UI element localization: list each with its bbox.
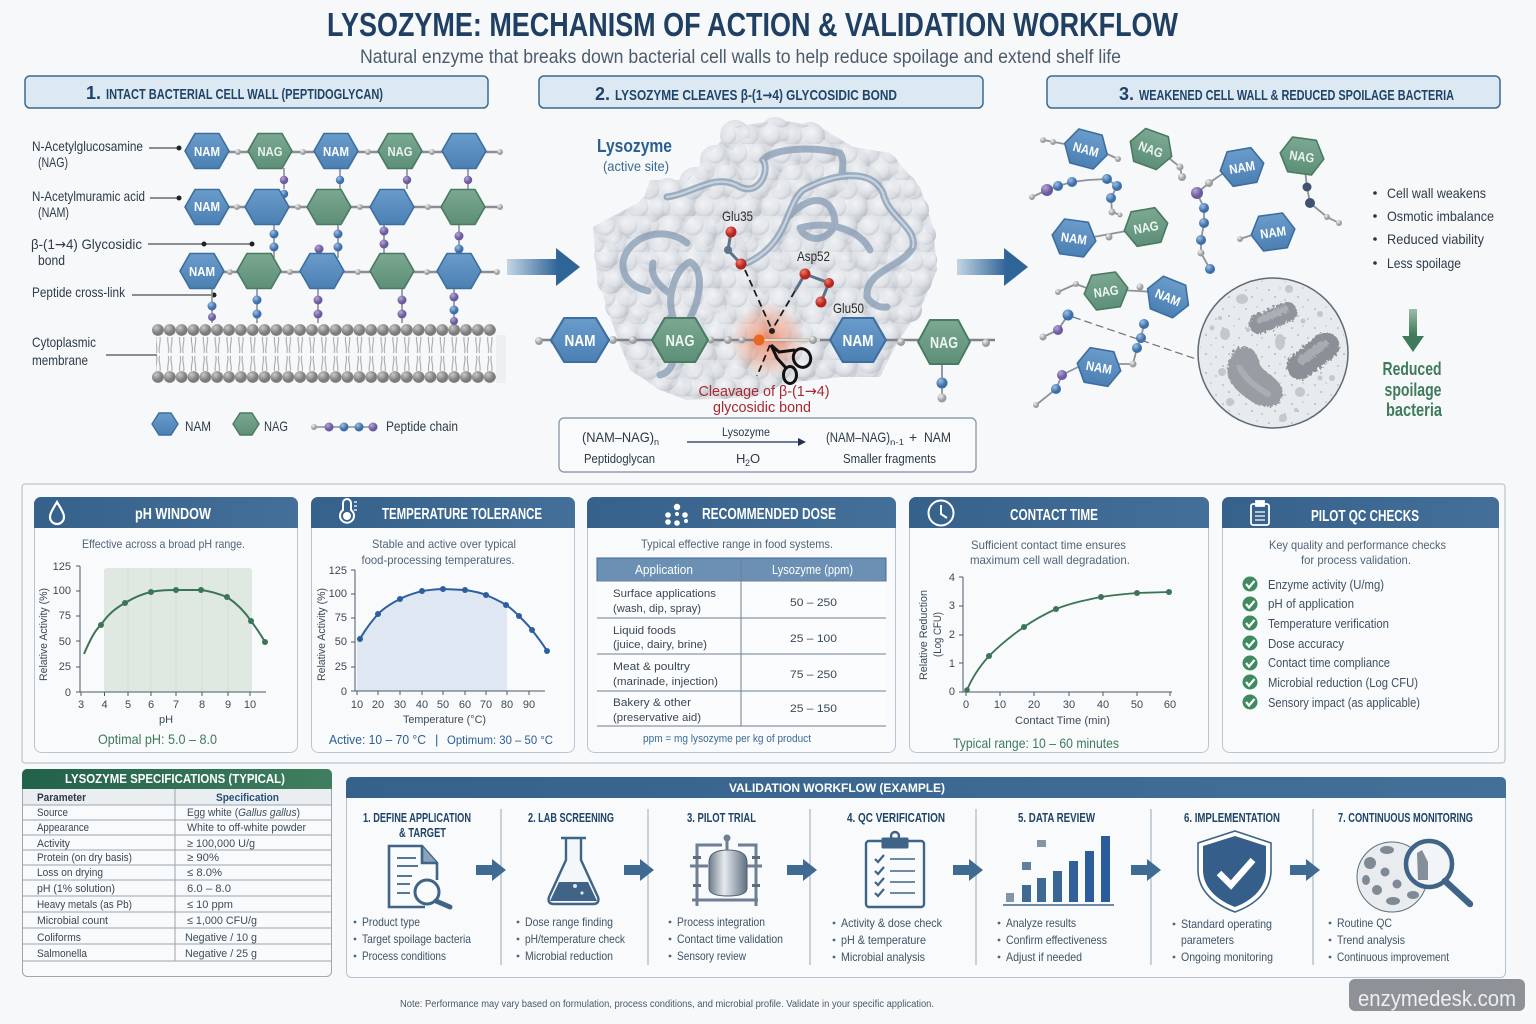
specifications table: Protein (on dry basis) xyxy=(37,852,132,864)
step 2: lab screening: Microbial reduction xyxy=(525,949,613,963)
specifications table: Heavy metals (as Pb) xyxy=(37,899,132,911)
dose table: Surface applications xyxy=(613,588,717,600)
step 7: continuous monitoring: Routine QC xyxy=(1337,916,1392,930)
icon: water drop xyxy=(50,502,64,524)
label: glycosidic bond: β-(1→4) Glycosidic xyxy=(31,236,142,253)
hexagon fragments: NAM xyxy=(1153,286,1183,309)
pilot check list xyxy=(1242,576,1420,710)
dose table: Application xyxy=(635,562,693,577)
temperature activity chart: 75 xyxy=(335,612,347,624)
specifications table: Activity xyxy=(37,838,70,850)
temperature activity chart: 125 xyxy=(329,565,347,577)
hexagon fragments: NAG xyxy=(1093,282,1119,301)
cleavage label: Cleavage of β-(1→4) xyxy=(698,382,830,400)
workflow header: VALIDATION WORKFLOW (EXAMPLE) xyxy=(729,781,945,795)
step 3: pilot trial: Contact time validation xyxy=(677,932,783,946)
step 7: continuous monitoring: Continuous improvement xyxy=(1337,950,1450,964)
contact time chart xyxy=(918,572,1176,727)
temperature activity chart: Temperature (°C) xyxy=(403,714,486,726)
pH activity chart: 5 xyxy=(125,699,131,711)
pilot check list: Dose accuracy xyxy=(1268,637,1345,651)
temperature caption: Active: 10 – 70 °C xyxy=(329,732,426,747)
arrow: reduced spoilage xyxy=(1402,309,1424,352)
step 4: QC verification xyxy=(833,811,945,964)
contact time chart: 0 xyxy=(949,686,955,698)
temperature activity chart: 80 xyxy=(501,699,513,711)
step 1 header xyxy=(25,76,488,108)
label: N-Acetylmuramic acid: N-Acetylmuramic acid xyxy=(32,188,145,204)
pH activity chart: 6 xyxy=(148,699,154,711)
hexagon fragments: NAM xyxy=(1071,139,1100,160)
pilot check list: pH of application xyxy=(1268,597,1354,611)
label: peptide cross-link: Peptide cross-link xyxy=(32,284,126,300)
hexagon sugars: NAM xyxy=(323,144,349,159)
temperature activity chart: 30 xyxy=(394,699,406,711)
specifications table: 6.0 – 8.0 xyxy=(187,883,231,895)
dose subtitle: Typical effective range in food systems. xyxy=(641,537,833,551)
step 7: continuous monitoring xyxy=(1329,811,1473,964)
pH activity chart: Relative Activity (%) xyxy=(38,588,50,681)
panel: temperature tolerance xyxy=(311,497,575,752)
contact time chart: 4 xyxy=(949,572,955,584)
step 7: continuous monitoring: 7. CONTINUOUS MONITORING xyxy=(1338,811,1473,825)
step 5: data review: Confirm effectiveness xyxy=(1006,933,1107,947)
dose table: Meat & poultry xyxy=(613,661,691,673)
peptide fragments xyxy=(1029,137,1342,408)
step 1: define application: & TARGET xyxy=(399,826,446,840)
legend: NAM xyxy=(185,418,211,434)
icon: thermometer xyxy=(340,499,357,523)
specifications table: pH (1% solution) xyxy=(37,883,115,895)
dose table: Lysozyme (ppm) xyxy=(772,562,853,577)
dose table: 75 – 250 xyxy=(790,669,837,681)
specifications table: Salmonella xyxy=(37,948,88,960)
step 6: implementation: Standard operating xyxy=(1181,917,1272,931)
pH activity chart: pH xyxy=(159,714,173,726)
substrate hexagons: NAM xyxy=(842,333,874,350)
pilot check list: Microbial reduction (Log CFU) xyxy=(1268,676,1418,690)
legend: Peptide chain xyxy=(386,418,458,434)
label: cytoplasmic membrane: Cytoplasmic xyxy=(32,334,96,350)
pilot subtitle xyxy=(1269,538,1446,567)
step 5: data review: 5. DATA REVIEW xyxy=(1018,811,1095,825)
workflow arrows xyxy=(476,859,1320,881)
arrow: step 2 to step 3 xyxy=(957,248,1028,286)
heading: lysozyme active site: (active site) xyxy=(603,158,669,174)
specifications table: Appearance xyxy=(37,822,89,834)
step 2: lab screening: 2. LAB SCREENING xyxy=(528,811,614,825)
step 5: data review: Adjust if needed xyxy=(1006,950,1082,964)
reduced spoilage label xyxy=(1382,359,1443,420)
step 2: lab screening xyxy=(517,811,626,963)
temperature activity chart: 25 xyxy=(335,661,347,673)
contact time chart: 10 xyxy=(994,699,1006,711)
step 4: QC verification: pH & temperature xyxy=(841,933,926,947)
label: N-Acetylglucosamine: (NAG) xyxy=(38,154,68,170)
substrate hexagons xyxy=(551,318,970,364)
contact time chart: 60 xyxy=(1164,699,1176,711)
panel: lysozyme enzyme action xyxy=(535,117,995,472)
step 1 header: 1. xyxy=(86,83,101,103)
step 7: continuous monitoring: Trend analysis xyxy=(1337,933,1405,947)
optimal pH caption: Optimal pH: 5.0 – 8.0 xyxy=(98,731,217,747)
temperature caption: | xyxy=(435,732,438,747)
label: glycosidic bond: bond xyxy=(38,252,65,268)
specifications table: White to off-white powder xyxy=(187,822,306,834)
reaction equation box: (NAM–NAG) xyxy=(826,429,890,445)
pilot subtitle: Key quality and performance checks xyxy=(1269,538,1446,552)
step 6: implementation: 6. IMPLEMENTATION xyxy=(1184,811,1280,825)
specifications table: Egg white (Gallus gallus) xyxy=(187,807,300,819)
reaction equation box: n xyxy=(654,437,659,447)
step 1: define application xyxy=(354,811,471,963)
dose footnote: ppm = mg lysozyme per kg of product xyxy=(643,733,811,745)
reaction equation box: O xyxy=(750,451,760,466)
subtitle: Natural enzyme that breaks down bacterial cell walls to help reduce spoilage and extend shelf life xyxy=(360,47,1121,68)
hexagon fragments: NAG xyxy=(1289,147,1315,166)
dose table: Liquid foods xyxy=(613,625,677,637)
panel: validation workflow xyxy=(346,777,1506,978)
step 4: QC verification: Activity & dose check xyxy=(841,916,943,930)
contact time chart: 0 xyxy=(963,699,969,711)
contact time chart: 40 xyxy=(1097,699,1109,711)
reaction equation box: n-1 xyxy=(890,438,905,447)
reaction equation box: Lysozyme xyxy=(722,425,770,439)
title: LYSOZYME: MECHANISM OF ACTION & VALIDATION WORKFLOW xyxy=(327,6,1179,43)
contact header: CONTACT TIME xyxy=(1010,507,1098,524)
dashed zoom line xyxy=(1073,317,1196,359)
effect bullet list: Less spoilage xyxy=(1387,255,1461,271)
temperature header xyxy=(311,497,575,528)
pH activity chart: 25 xyxy=(59,661,71,673)
step 3 header: 3. xyxy=(1119,84,1134,104)
temperature activity chart: 100 xyxy=(329,588,347,600)
step 2 header xyxy=(539,76,983,108)
step 2 header: LYSOZYME CLEAVES β-(1→4) GLYCOSIDIC BOND xyxy=(615,86,897,104)
glycan strands xyxy=(202,149,503,275)
step 6: implementation xyxy=(1173,811,1280,964)
temperature activity chart: 40 xyxy=(416,699,428,711)
step 6: implementation: Ongoing monitoring xyxy=(1181,950,1273,964)
dose table: Bakery & other xyxy=(613,697,691,709)
hexagon sugars: NAG xyxy=(388,144,412,159)
watermark: enzymedesk.com xyxy=(1358,986,1516,1011)
temperature subtitle xyxy=(362,537,516,567)
active site residues: Glu50 xyxy=(833,300,864,316)
specifications table: ≥ 90% xyxy=(187,852,219,864)
pH activity chart: 9 xyxy=(225,699,231,711)
hexagon sugars: NAM xyxy=(189,264,215,279)
step 1: define application: 1. DEFINE APPLICATION xyxy=(363,811,471,825)
pilot header xyxy=(1222,497,1499,528)
reaction equation box: NAM xyxy=(924,429,951,445)
dose table: (preservative aid) xyxy=(613,712,701,724)
step 2 header: 2. xyxy=(595,84,610,104)
specifications table: ≤ 10 ppm xyxy=(187,899,233,911)
heading: lysozyme active site xyxy=(597,136,672,174)
protein ribbon xyxy=(623,149,913,375)
pH activity chart: 7 xyxy=(173,699,179,711)
temperature caption xyxy=(329,732,553,747)
dose table: (wash, dip, spray) xyxy=(613,603,701,615)
step 3: pilot trial: 3. PILOT TRIAL xyxy=(687,811,756,825)
panel: pilot QC checks xyxy=(1222,497,1499,752)
heading: lysozyme active site: Lysozyme xyxy=(597,136,672,156)
reduced spoilage label: bacteria xyxy=(1386,400,1443,420)
substrate hexagons: NAM xyxy=(564,333,596,350)
dose table: (marinade, injection) xyxy=(613,676,718,688)
icon: document magnifier xyxy=(389,846,450,907)
specifications table: Microbial count xyxy=(37,915,108,927)
temperature activity chart: 50 xyxy=(437,699,449,711)
reaction equation box: Smaller fragments xyxy=(843,451,936,466)
hexagon fragments: NAG xyxy=(1137,138,1165,161)
icon: scissors xyxy=(771,345,814,384)
panel: intact cell wall diagram xyxy=(31,134,506,435)
specifications table: Specification xyxy=(216,792,279,804)
temperature activity chart: 10 xyxy=(351,699,363,711)
temperature caption: Optimum: 30 – 50 °C xyxy=(447,733,553,747)
panel: lysozyme specifications xyxy=(22,769,332,976)
hexagon sugars: NAG xyxy=(258,144,282,159)
hexagon sugars: NAM xyxy=(194,199,220,214)
reaction equation box: 2 xyxy=(745,458,750,468)
active site residues xyxy=(722,208,864,376)
step 5: data review xyxy=(998,811,1114,964)
reaction equation box: + xyxy=(909,429,917,445)
contact time chart: 30 xyxy=(1063,699,1075,711)
hexagon sugars xyxy=(180,134,486,288)
reduced spoilage label: spoilage xyxy=(1384,380,1442,400)
dose header xyxy=(587,497,896,528)
pilot subtitle: for process validation. xyxy=(1301,553,1411,567)
label: cytoplasmic membrane: membrane xyxy=(32,352,88,368)
reaction equation box: (NAM–NAG) xyxy=(582,429,654,445)
label: N-Acetylmuramic acid: (NAM) xyxy=(38,204,69,220)
substrate hexagons: NAG xyxy=(666,333,694,350)
specifications table: Coliforms xyxy=(37,932,81,944)
contact time chart: 3 xyxy=(949,600,955,612)
specifications table: Negative / 25 g xyxy=(185,948,257,960)
label: peptide cross-link xyxy=(32,284,216,300)
label: cytoplasmic membrane xyxy=(32,334,157,368)
effect bullet list: Reduced viability xyxy=(1387,231,1484,247)
contact time chart: 50 xyxy=(1131,699,1143,711)
label: glycosidic bond xyxy=(31,236,254,268)
panel: recommended dose xyxy=(587,497,896,752)
step 1 header: INTACT BACTERIAL CELL WALL (PEPTIDOGLYCAN) xyxy=(106,86,383,103)
pH activity chart: 100 xyxy=(53,585,71,597)
pilot header: PILOT QC CHECKS xyxy=(1311,508,1419,525)
arrow: step 1 to step 2 xyxy=(507,248,580,286)
cleavage glow xyxy=(730,302,806,378)
substrate hexagons: NAG xyxy=(930,335,958,352)
contact time chart: 2 xyxy=(949,629,955,641)
step 2: lab screening: Dose range finding xyxy=(525,915,613,929)
step 1: define application: Process conditions xyxy=(362,949,446,963)
step 3 header xyxy=(1047,76,1500,108)
dose table: 50 – 250 xyxy=(790,597,837,609)
icon: pilot tank xyxy=(690,834,762,906)
pH activity chart xyxy=(38,561,268,726)
hexagon fragments: NAM xyxy=(1259,223,1287,242)
panel: weakened cell wall fragments xyxy=(1029,125,1494,428)
pH activity chart: 3 xyxy=(78,699,84,711)
reduced spoilage label: Reduced xyxy=(1382,359,1442,379)
cleavage label: glycosidic bond xyxy=(713,399,811,416)
contact time chart: 20 xyxy=(1028,699,1040,711)
contact subtitle xyxy=(970,538,1130,567)
step 3: pilot trial xyxy=(669,811,783,963)
effect bullet list: Cell wall weakens xyxy=(1387,185,1486,201)
cleavage label xyxy=(698,382,830,416)
step 3: pilot trial: Process integration xyxy=(677,915,765,929)
pH activity chart: 8 xyxy=(199,699,205,711)
performance section frame xyxy=(22,484,1505,763)
hexagon sugars: NAM xyxy=(194,144,220,159)
step 4: QC verification: Microbial analysis xyxy=(841,950,925,964)
effect bullet list xyxy=(1373,185,1494,271)
temperature activity chart: 70 xyxy=(480,699,492,711)
icon: shield check xyxy=(1198,831,1271,912)
label: N-Acetylmuramic acid xyxy=(32,188,182,220)
reaction equation box: H xyxy=(736,451,745,466)
temperature activity chart: 60 xyxy=(459,699,471,711)
specifications table: Negative / 10 g xyxy=(185,932,257,944)
temperature subtitle: Stable and active over typical xyxy=(372,537,516,551)
specifications table: ≤ 8.0% xyxy=(187,867,222,879)
pilot check list: Sensory impact (as applicable) xyxy=(1268,696,1420,710)
temperature header: TEMPERATURE TOLERANCE xyxy=(382,506,542,523)
icon: clipboard xyxy=(1251,501,1269,525)
label: N-Acetylglucosamine: N-Acetylglucosamine xyxy=(32,138,143,154)
contact caption: Typical range: 10 – 60 minutes xyxy=(953,735,1119,751)
contact header xyxy=(909,497,1209,528)
pilot check list: Contact time compliance xyxy=(1268,656,1390,670)
step 1: define application: Target spoilage bacteria xyxy=(362,932,471,946)
specifications header xyxy=(22,769,332,789)
specifications table: Parameter xyxy=(37,792,87,804)
temperature activity chart: 90 xyxy=(523,699,535,711)
panel: pH window xyxy=(34,497,298,752)
pH activity chart: 50 xyxy=(59,636,71,648)
temperature activity chart: Relative Activity (%) xyxy=(316,588,328,681)
icon: clipboard checklist xyxy=(866,832,924,907)
temperature activity chart: 0 xyxy=(341,686,347,698)
reaction equation box: Peptidoglycan xyxy=(584,451,655,466)
pH activity chart: 4 xyxy=(101,699,108,711)
temperature subtitle: food-processing temperatures. xyxy=(362,553,514,567)
lysozyme protein surface xyxy=(593,117,937,400)
micrograph of bacteria xyxy=(1198,278,1348,428)
temperature activity chart: 50 xyxy=(335,636,347,648)
legend xyxy=(152,413,458,435)
step 1: define application: Product type xyxy=(362,915,420,929)
label: N-Acetylglucosamine xyxy=(32,138,182,170)
contact time chart: (Log CFU) xyxy=(932,612,944,657)
icon: bar chart xyxy=(1003,836,1114,905)
temperature activity chart xyxy=(316,565,550,726)
substrate chain xyxy=(535,334,995,402)
pH header: pH WINDOW xyxy=(135,506,212,523)
step 5: data review: Analyze results xyxy=(1006,916,1076,930)
hexagon fragments: NAG xyxy=(1132,218,1160,237)
active site residues: Glu35 xyxy=(722,208,753,224)
step 6: implementation: parameters xyxy=(1181,933,1234,947)
workflow header xyxy=(346,777,1506,798)
pH activity chart: 0 xyxy=(65,687,71,699)
icon: petri dish magnifier xyxy=(1357,841,1470,912)
contact time chart: 1 xyxy=(949,658,955,670)
dose header: RECOMMENDED DOSE xyxy=(702,506,836,523)
temperature activity chart: 20 xyxy=(372,699,384,711)
dose table: (juice, dairy, brine) xyxy=(613,639,707,651)
contact subtitle: Sufficient contact time ensures xyxy=(971,538,1126,552)
pH subtitle: Effective across a broad pH range. xyxy=(82,537,245,551)
pH activity chart: 75 xyxy=(59,610,71,622)
icon: flask xyxy=(549,838,598,904)
specifications table: Loss on drying xyxy=(37,867,103,879)
specifications table: ≥ 100,000 U/g xyxy=(187,838,255,850)
pH header xyxy=(34,497,298,528)
step 3: pilot trial: Sensory review xyxy=(677,949,746,963)
contact time chart: Contact Time (min) xyxy=(1015,715,1110,727)
pilot check list: Temperature verification xyxy=(1268,617,1389,631)
contact time chart: Relative Reduction xyxy=(918,590,930,680)
cytoplasmic membrane xyxy=(152,323,506,384)
specifications table: ≤ 1,000 CFU/g xyxy=(187,915,257,927)
specifications header: LYSOZYME SPECIFICATIONS (TYPICAL) xyxy=(65,771,285,786)
icon: dose dots xyxy=(665,504,688,526)
peptide cross-links xyxy=(208,168,472,325)
icon: clock xyxy=(928,500,954,526)
hexagon fragments xyxy=(1050,125,1326,388)
panel: contact time xyxy=(909,497,1209,752)
hexagon fragments: NAM xyxy=(1228,158,1256,177)
dose table xyxy=(597,558,886,726)
effect bullet list: Osmotic imbalance xyxy=(1387,208,1494,224)
step 4: QC verification: 4. QC VERIFICATION xyxy=(847,811,945,825)
pH activity chart: 125 xyxy=(53,561,71,573)
specifications table xyxy=(23,789,331,961)
contact subtitle: maximum cell wall degradation. xyxy=(970,553,1130,567)
dose table: 25 – 100 xyxy=(790,633,837,645)
specifications table: Source xyxy=(37,807,68,819)
reaction equation box xyxy=(559,418,976,472)
step 2: lab screening: pH/temperature check xyxy=(525,932,626,946)
pH activity chart: 10 xyxy=(244,699,256,711)
active site residues: Asp52 xyxy=(797,248,830,264)
footnote: Note: Performance may vary based on formulation, process conditions, and microbial profile. Validate in your specific application. xyxy=(400,999,934,1010)
hexagon fragments: NAM xyxy=(1085,358,1113,377)
hexagon fragments: NAM xyxy=(1060,229,1088,248)
pilot check list: Enzyme activity (U/mg) xyxy=(1268,578,1384,592)
dose table: 25 – 150 xyxy=(790,703,837,715)
legend: NAG xyxy=(264,418,288,434)
